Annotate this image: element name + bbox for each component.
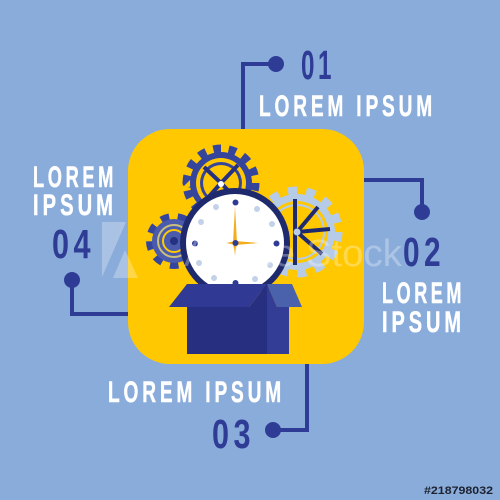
clock hands — [226, 206, 259, 256]
heading 03: LOREM IPSUM — [108, 376, 285, 409]
icon: right gear — [256, 191, 338, 273]
icon: clock — [180, 188, 290, 298]
watermark: Adobe Stock — [184, 233, 403, 275]
clock hour markers — [196, 204, 275, 282]
icon: top gear — [187, 149, 255, 217]
heading 04: 04 — [52, 221, 95, 267]
heading 04 — [33, 161, 117, 267]
heading 01 — [259, 42, 436, 123]
heading 03: 03 — [212, 411, 255, 457]
watermark — [102, 222, 403, 278]
heading 04: LOREM — [33, 161, 117, 194]
heading 02 — [382, 229, 465, 339]
icon: left gear — [150, 217, 198, 265]
image id: #218798032 — [424, 485, 493, 497]
icon: open box — [169, 284, 302, 354]
connector 02 — [362, 180, 428, 218]
central yellow panel — [128, 129, 364, 364]
connector 01 — [243, 58, 282, 130]
heading 03 — [108, 376, 285, 457]
heading 04: IPSUM — [33, 189, 117, 222]
connector 03 — [267, 362, 307, 436]
connector 04 — [66, 274, 130, 314]
clock cardinal markers — [192, 200, 280, 286]
heading 02: 02 — [403, 229, 445, 275]
heading 01: 01 — [301, 42, 335, 88]
